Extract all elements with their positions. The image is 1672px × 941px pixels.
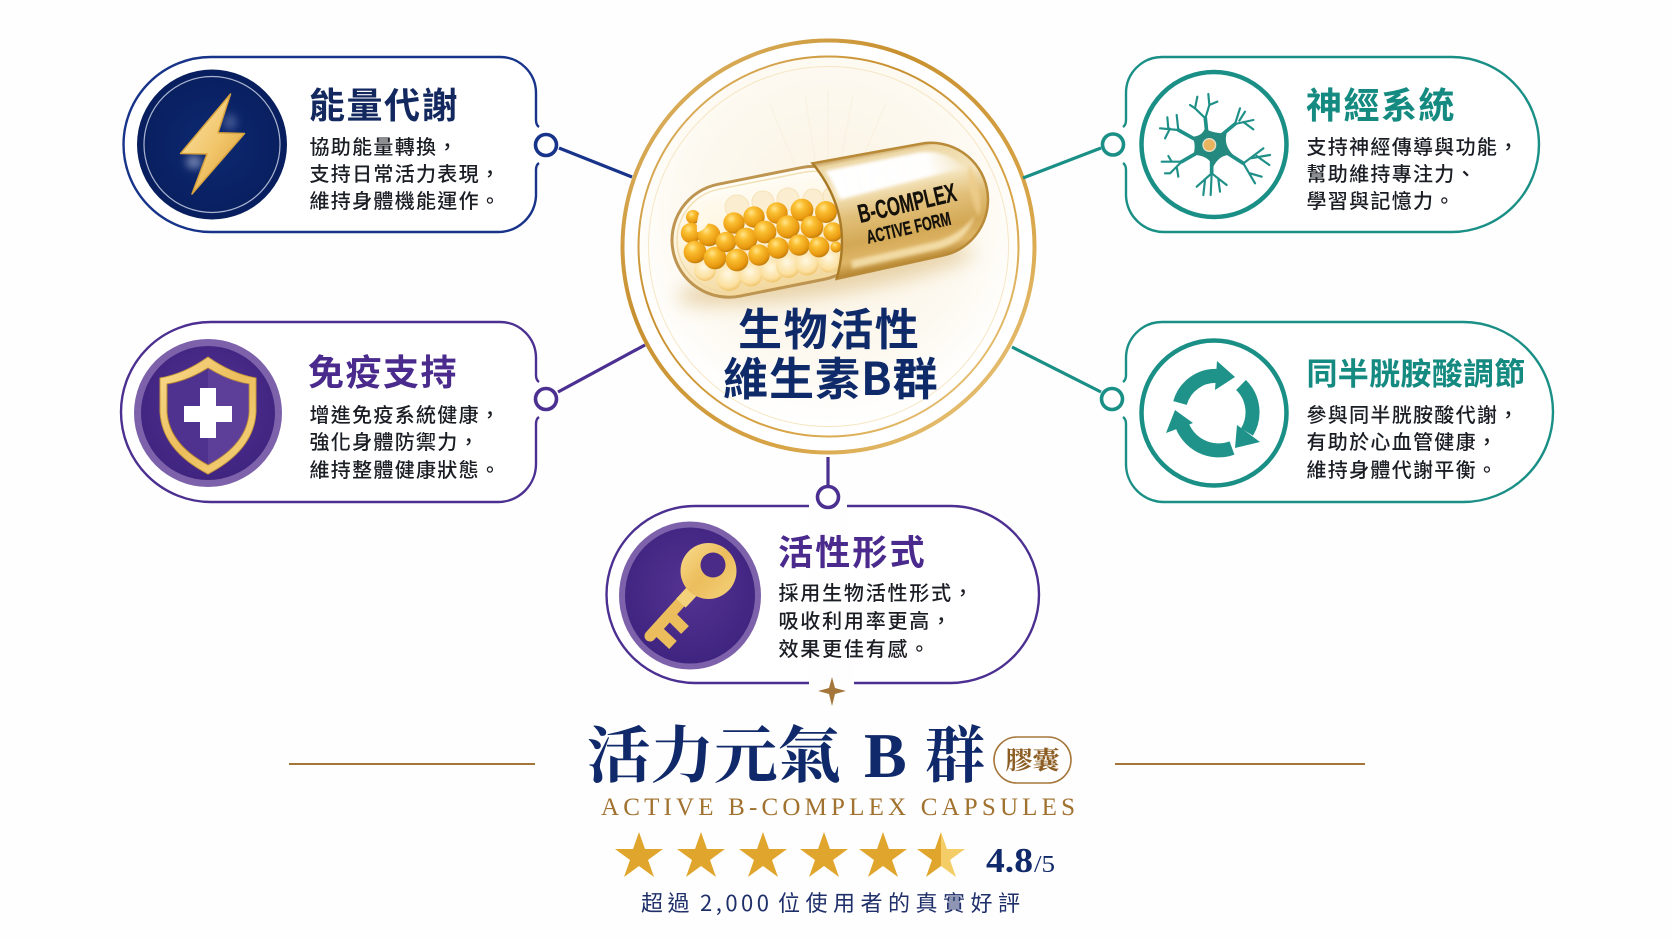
panel: homocysteine regulation [1102, 322, 1553, 502]
review count: 超過 [641, 886, 694, 918]
central title [723, 294, 939, 408]
text block: 幫助維持專注力、 [1306, 158, 1477, 187]
product title [587, 720, 985, 791]
text block [310, 399, 501, 483]
capsule illustration [670, 142, 990, 316]
connector lines [558, 148, 1101, 485]
panel: nervous system [1102, 57, 1539, 232]
review count: 位使用者的真實好評 [778, 886, 1026, 918]
text block: 支持神經傳導與功能， [1306, 131, 1520, 160]
text block: 有助於心血管健康， [1306, 426, 1498, 455]
text block: 強化身體防禦力， [310, 426, 480, 455]
icon: divider sparkle [818, 677, 846, 706]
review count: 2,000 [700, 886, 772, 918]
text block [778, 577, 975, 662]
icon: shield [134, 339, 282, 487]
capsule gold cap [813, 131, 998, 279]
rating value: 4.8 [986, 841, 1033, 880]
text block [1306, 399, 1520, 483]
panel: immune support [121, 322, 556, 502]
heading: 神經系統 [1306, 77, 1456, 129]
text block [1306, 131, 1520, 214]
divider lines [289, 763, 1365, 765]
product title: 群 [925, 723, 985, 791]
heading: 能量代謝 [309, 77, 459, 129]
icon: cycle arrows [1142, 340, 1286, 486]
capsule label: B-COMPLEX [855, 177, 960, 229]
panel: energy metabolism [124, 57, 556, 232]
text block: 維持身體機能運作。 [310, 185, 501, 214]
text block: 協助能量轉換， [310, 131, 459, 160]
heading: 同半胱胺酸調節 [1306, 349, 1526, 394]
rating value [986, 841, 1055, 880]
text block: 參與同半胱胺酸代謝， [1306, 399, 1520, 428]
icon: neuron [1142, 72, 1286, 217]
heading: 免疫支持 [308, 344, 458, 396]
central title: 維生素B群 [723, 343, 939, 408]
capsule label: ACTIVE FORM [865, 209, 953, 249]
heading: 活性形式 [778, 525, 927, 576]
text block: 吸收利用率更高， [778, 605, 953, 634]
text block: 採用生物活性形式， [778, 577, 975, 606]
central title: 生物活性 [738, 294, 920, 358]
icon: key [619, 522, 761, 670]
text block [310, 131, 501, 214]
text block: 維持身體代謝平衡。 [1306, 454, 1498, 483]
central circle [622, 40, 1034, 452]
badge: capsule form [994, 737, 1071, 783]
product title: B [864, 720, 907, 791]
text block: 增進免疫系統健康， [310, 399, 501, 428]
text block: 維持整體健康狀態。 [310, 454, 501, 483]
rating value: /5 [1034, 852, 1055, 878]
icon: lightning bolt [137, 70, 287, 220]
star rating [615, 832, 1055, 880]
product title: 活力元氣 [587, 723, 841, 791]
capsule beads [681, 187, 843, 291]
badge: capsule form: 膠囊 [1006, 747, 1060, 775]
text block: 效果更佳有感。 [778, 633, 931, 662]
capsule label [855, 177, 964, 249]
panel: active form [606, 486, 1039, 683]
subtitle: ACTIVE B-COMPLEX CAPSULES [601, 794, 1075, 821]
text block: 學習與記憶力。 [1306, 185, 1456, 214]
text block: 支持日常活力表現， [310, 158, 501, 187]
